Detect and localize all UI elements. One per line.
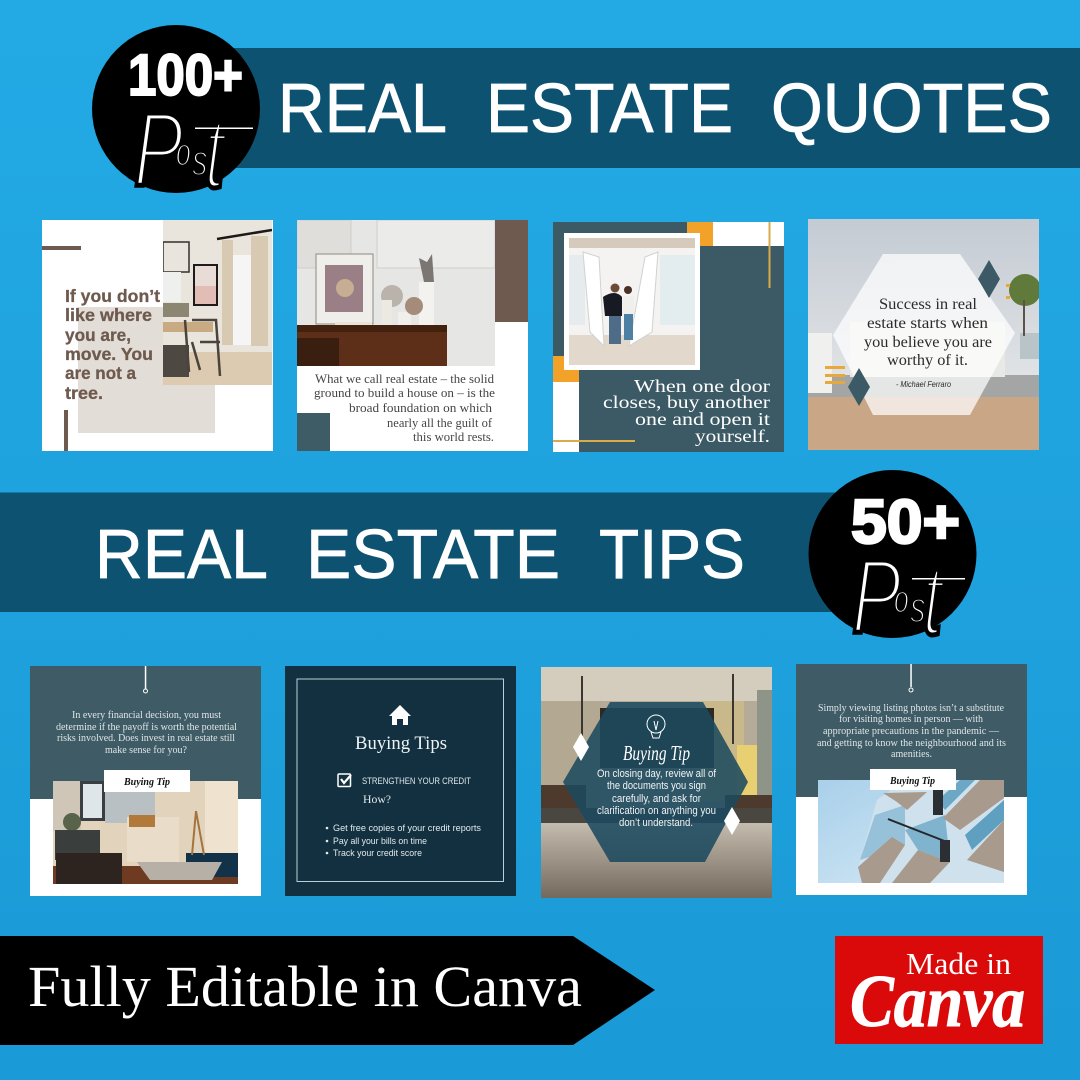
tip text: make sense for you? xyxy=(105,745,188,756)
tip text: In every financial decision, you must xyxy=(72,710,221,721)
card: if you don't like where you are xyxy=(42,220,273,451)
badge: 50+ post xyxy=(808,470,976,656)
quote text xyxy=(314,372,495,444)
decorative triangles xyxy=(825,284,1010,384)
quote text: like where xyxy=(65,305,152,325)
photo: couple at door xyxy=(569,238,695,365)
quote text: yourself. xyxy=(695,426,770,446)
ribbon: fully editable in canva: Fully Editable in Canva xyxy=(28,954,582,1019)
quote text: move. You xyxy=(65,344,153,364)
tip text: On closing day, review all of xyxy=(597,768,717,780)
tip text: Simply viewing listing photos isn’t a substitute xyxy=(818,703,1005,714)
tip text: risks involved. Does invest in real estate still xyxy=(57,733,235,744)
title: real estate quotes: QUOTES xyxy=(771,69,1052,147)
quote text: When one door xyxy=(634,376,770,396)
quote text: ground to build a house on – is the xyxy=(314,386,495,400)
badge: 50+ post: t xyxy=(923,545,945,656)
quote text xyxy=(603,376,770,446)
quote text: worthy of it. xyxy=(887,352,968,369)
quote text xyxy=(864,296,992,389)
badge: 50+ post: s xyxy=(910,584,926,632)
badge: 100+ post: P xyxy=(134,91,183,208)
quote text: Success in real xyxy=(879,296,977,313)
badge: 100+ post: 100+ xyxy=(128,43,243,108)
quote text: closes, buy another xyxy=(603,392,770,412)
badge: 50+ post: P xyxy=(852,538,901,655)
title: real estate tips: ESTATE xyxy=(306,515,560,593)
photo: living room with wooden floor xyxy=(808,219,1041,450)
card: buying tips strengthen credit xyxy=(285,666,516,896)
bullet list: Pay all your bills on time xyxy=(333,836,427,847)
tip text xyxy=(56,710,237,756)
banner: real estate tips xyxy=(0,492,840,612)
tip text: for visiting homes in person — with xyxy=(839,714,983,725)
diamond: top right xyxy=(978,260,1000,298)
title: real estate quotes: ESTATE xyxy=(486,69,733,147)
label: buying tip: Buying Tip xyxy=(889,775,935,787)
card: buying tip closing day xyxy=(541,667,772,898)
quote text: you believe you are xyxy=(864,334,992,351)
quote text xyxy=(65,286,160,403)
photo: dining room xyxy=(163,220,272,385)
photo: apartment balconies xyxy=(818,780,1004,883)
quote text: this world rests. xyxy=(413,430,494,444)
label: buying tip xyxy=(104,770,190,792)
card: success in real estate xyxy=(808,219,1041,450)
photo: sideboard with frame and flowers xyxy=(297,220,495,366)
tip text: amenities. xyxy=(891,749,932,760)
bullet list xyxy=(326,823,481,859)
tip text: the documents you sign xyxy=(607,780,706,792)
badge: 100+ post: s xyxy=(192,137,208,185)
quote text: - Michael Ferraro xyxy=(896,380,951,389)
tip text: appropriate precautions in the pandemic — xyxy=(823,726,1000,737)
title: real estate quotes xyxy=(278,69,1052,147)
quote text: broad foundation on which xyxy=(349,401,493,415)
badge: 100+ post: t xyxy=(205,98,227,209)
badge: made in canva: Made in xyxy=(906,946,1012,981)
quote text: one and open it xyxy=(635,409,770,429)
quote text: are not a xyxy=(65,363,136,383)
icon: checkbox xyxy=(338,774,351,786)
photo: hotel bedroom xyxy=(541,667,772,898)
banner: real estate quotes xyxy=(230,48,1080,168)
hexagon overlay xyxy=(833,254,1015,415)
quote text: What we call real estate – the solid xyxy=(315,372,495,386)
diamond: upper left xyxy=(573,733,589,761)
badge: 100+ post: o xyxy=(176,130,191,173)
tip text: determine if the payoff is worth the potential xyxy=(56,722,237,733)
heading: buying tip script: Buying Tip xyxy=(623,741,690,765)
title: real estate tips xyxy=(95,515,745,593)
subheading: strengthen your credit: STRENGTHEN YOUR CREDIT xyxy=(362,776,471,786)
quote text: If you don’t xyxy=(65,286,160,306)
photo: living room with guitar xyxy=(53,781,238,884)
quote text: you are, xyxy=(65,325,131,345)
badge: 50+ post: o xyxy=(894,577,909,620)
heading: buying tips: Buying Tips xyxy=(355,733,447,754)
title: real estate tips: REAL xyxy=(95,515,268,593)
subheading: how: How? xyxy=(363,792,391,806)
card: buying tip listing photos xyxy=(796,664,1027,895)
ribbon: fully editable in canva xyxy=(0,936,655,1045)
card: when one door closes xyxy=(553,222,784,452)
title: real estate tips: TIPS xyxy=(599,515,745,593)
hexagon overlay xyxy=(563,702,748,862)
tip text: clarification on anything you xyxy=(597,805,716,817)
tip text xyxy=(597,768,717,829)
icon: light bulb xyxy=(647,715,665,738)
quote text: nearly all the guilt of xyxy=(387,416,493,430)
card: buying tip financial decision xyxy=(30,666,261,896)
diamond: lower right xyxy=(724,807,740,835)
badge: made in canva xyxy=(835,936,1043,1044)
quote text: estate starts when xyxy=(867,315,988,332)
card: what we call real estate xyxy=(297,220,528,451)
tip text: don’t understand. xyxy=(619,817,693,829)
bullet list: Get free copies of your credit reports xyxy=(333,823,481,834)
tip text: carefully, and ask for xyxy=(612,793,701,805)
diamond: bottom left xyxy=(848,368,870,406)
badge: 100+ post xyxy=(92,25,260,209)
tip text: and getting to know the neighbourhood and its xyxy=(817,738,1006,749)
icon: house xyxy=(389,705,411,725)
quote text: tree. xyxy=(65,383,103,403)
tip text xyxy=(817,703,1006,760)
badge: 50+ post: 50+ xyxy=(851,488,960,557)
bullet list: Track your credit score xyxy=(333,848,422,859)
title: real estate quotes: REAL xyxy=(278,69,447,147)
badge: made in canva: Canva xyxy=(850,961,1025,1043)
label: buying tip: Buying Tip xyxy=(123,776,170,788)
label: buying tip xyxy=(870,769,956,790)
